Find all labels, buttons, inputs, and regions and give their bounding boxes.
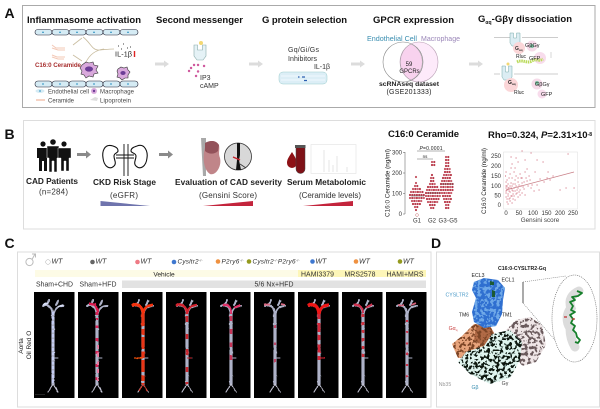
venn labels: Endothelial Cell	[367, 34, 417, 43]
venn labels: Macrophage	[421, 36, 460, 43]
text: evaluation of CAD severity: Evaluation of CAD severity	[175, 177, 282, 187]
text: evaluation of CAD severity: (Gensini Score)	[199, 191, 257, 200]
chart: scatter of ceramide vs Gensini: 150	[491, 174, 502, 180]
chart: scatter of ceramide vs Gensini: 50	[494, 194, 502, 200]
genotype legend: -/-	[296, 258, 300, 262]
aorta image 4	[166, 292, 206, 398]
genotype legend: -/-	[199, 258, 203, 262]
aorta image 8	[342, 292, 382, 398]
structure labels: TM1	[502, 312, 512, 318]
chart: beeswarm of ceramide by group: 100	[392, 192, 403, 198]
chart: scatter of ceramide vs Gensini: 100	[491, 184, 502, 190]
structure labels: Gα	[449, 326, 456, 332]
chart: beeswarm of ceramide by group: G3-G5	[438, 218, 458, 224]
gradient wedge: eGFR	[100, 201, 150, 206]
vehicle band: Vehicle	[153, 272, 175, 278]
IL-1 beta release: IL-1β	[115, 50, 132, 58]
structure labels: Nb35	[439, 382, 451, 388]
chart: scatter of ceramide vs Gensini: Gensini score	[521, 217, 560, 224]
chart: scatter of ceramide vs Gensini: 50	[516, 211, 523, 217]
genotype legend: WT	[52, 258, 63, 266]
chart: scatter of ceramide vs Gensini: 150	[541, 211, 552, 217]
diet labels: 5/6 Nx+HFD	[254, 282, 294, 288]
heading: G alpha q dissociation: αq	[485, 20, 492, 26]
heading: G alpha q dissociation: G	[478, 14, 485, 25]
chart: scatter of ceramide vs Gensini: 250	[491, 154, 502, 160]
culture dish	[279, 72, 327, 84]
dissociation schematic: GβGγ	[535, 82, 550, 88]
structure labels: Gγ	[502, 381, 509, 387]
dissociation schematic: αq	[512, 82, 516, 86]
chart title: C16:0 ceramide: C16:0 Ceramide	[388, 129, 459, 140]
icon: male symbol	[26, 254, 36, 266]
genotype legend: Cysltr2	[252, 258, 274, 266]
IP3 and cAMP	[200, 75, 219, 90]
genotype legend: WT	[96, 258, 107, 266]
genotype legend: -/-	[274, 258, 279, 262]
structure labels: ECL1	[502, 278, 515, 284]
icon: heart	[201, 138, 220, 176]
venn diagram	[383, 42, 438, 82]
text: serum metabolomic: Serum Metabolomic	[287, 177, 366, 187]
genotype legend: WT	[403, 258, 415, 266]
genotype legend	[46, 258, 415, 266]
axis label: aorta oil red O: Aorta	[18, 338, 25, 354]
axis label: aorta oil red O: Oil Red O	[26, 331, 33, 359]
chart: beeswarm of ceramide by group: P=0.0001	[420, 146, 443, 152]
chart: beeswarm of ceramide by group: ns	[423, 154, 428, 159]
diet labels: Sham+CHD	[36, 282, 73, 288]
dissociation schematic: GβGγ	[525, 43, 540, 49]
dataset caption	[379, 81, 440, 96]
chart: scatter of ceramide vs Gensini: 0	[498, 203, 502, 209]
callout: ligand density	[552, 275, 597, 362]
macrophages	[80, 62, 130, 80]
gradient wedge: Gensini	[203, 201, 253, 206]
aorta image 1	[34, 292, 74, 398]
panel label D: D	[431, 235, 441, 251]
chart: scatter of ceramide vs Gensini: 0	[504, 211, 508, 217]
chart: beeswarm of ceramide by group: 0	[399, 212, 403, 218]
blue CYSLTR2 receptor	[472, 278, 505, 328]
heading: GPCR expression: GPCR expression	[373, 15, 454, 26]
vehicle band	[35, 270, 298, 278]
panel label B: B	[4, 126, 15, 142]
arrow	[249, 60, 263, 68]
legend: inflammasome cells	[36, 88, 135, 104]
chart: scatter of ceramide vs Gensini: 200	[491, 164, 502, 170]
genotype legend: WT	[316, 258, 327, 266]
genotype legend: P2ry6	[278, 258, 296, 266]
mint G beta gamma density	[458, 330, 522, 384]
ceramide molecules	[52, 45, 65, 59]
treatment bands: MRS2578	[344, 272, 376, 278]
chart: beeswarm of ceramide by group	[384, 146, 458, 224]
heading: inflammasome activation: Inflammasome activation	[27, 15, 141, 26]
treatment bands: HAMI3379	[301, 272, 334, 278]
inhibitors: Inhibitors	[288, 56, 318, 63]
dissociation schematic: GFP	[529, 56, 541, 62]
panel: C	[4, 235, 431, 407]
dissociation schematic: Rluc	[514, 90, 525, 96]
panel: A	[4, 5, 595, 108]
structure labels: CYSLTR2	[446, 292, 469, 298]
panel label A: A	[4, 5, 15, 21]
chart: scatter of ceramide vs Gensini: C16:0 Ceramide (ng/ml)	[481, 148, 488, 214]
arrow	[469, 60, 483, 68]
chart: scatter of ceramide vs Gensini: 200	[555, 211, 566, 217]
diet labels	[36, 280, 426, 288]
aorta image 2	[78, 292, 118, 398]
venn diagram: GPCRs	[399, 69, 420, 75]
arrow	[77, 150, 91, 158]
aorta image 7	[298, 292, 338, 398]
chart title: Rho: Rho=0.324, P=2.31×10	[488, 130, 588, 141]
structure labels: Gβ	[471, 385, 479, 391]
structure labels: ECL3	[472, 273, 485, 279]
gradient wedge: ceramide	[303, 201, 353, 206]
dissociation schematic	[494, 33, 558, 98]
endothelial cell rows	[35, 30, 138, 87]
axis label: aorta oil red O	[18, 331, 33, 359]
icon: angiography lens	[224, 143, 252, 170]
venn diagram: 59	[406, 62, 413, 68]
venn labels	[367, 34, 460, 43]
icon: kidneys	[103, 144, 147, 176]
inhibitors	[288, 47, 330, 71]
structure labels: TM6	[459, 312, 469, 318]
chart: scatter of ceramide vs Gensini: 100	[528, 211, 539, 217]
text: CAD patients: (n=284)	[39, 188, 68, 196]
dataset caption: scRNAseq dataset	[379, 81, 440, 88]
arrow	[155, 60, 169, 68]
label: C16:0 ceramide: C16:0 Ceramide	[35, 62, 82, 69]
icon: patients	[37, 139, 71, 172]
legend: inflammasome cells: Endothelial cell	[48, 90, 89, 96]
IP3 and cAMP: IP3	[200, 75, 211, 82]
chart title: Rho: -8	[588, 132, 592, 138]
title: structure: C16:0-CYSLTR2-Gq	[498, 266, 546, 272]
inhibitors: IL-1β	[314, 64, 330, 71]
genotype legend: WT	[140, 258, 152, 266]
treatment bands: HAMI+MRS	[386, 272, 424, 278]
text: CAD patients	[26, 176, 78, 196]
inhibitors: Gq/Gi/Gs	[288, 47, 320, 54]
genotype legend: WT	[359, 258, 371, 266]
text: evaluation of CAD severity	[175, 177, 282, 200]
panel label C: C	[4, 235, 15, 251]
text: CAD patients: CAD Patients	[26, 176, 78, 186]
treatment bands	[298, 270, 426, 278]
dissociation schematic: GFP	[541, 92, 553, 98]
IL-1 beta release	[115, 44, 134, 58]
chart: scatter of ceramide vs Gensini: 250	[568, 211, 579, 217]
chart: beeswarm of ceramide by group: 200	[392, 171, 403, 177]
text: CKD risk stage: CKD Risk Stage	[93, 177, 156, 187]
icon: receptor	[194, 41, 206, 60]
chart: beeswarm of ceramide by group: G1	[413, 218, 422, 224]
dataset caption: (GSE201333)	[386, 89, 432, 96]
IP3 and cAMP: cAMP	[200, 83, 219, 90]
heading: second messenger: Second messenger	[156, 15, 243, 26]
bracket	[522, 282, 524, 303]
zoom callout lines	[523, 276, 566, 346]
orange G alpha q density	[452, 324, 498, 358]
genotype legend: Cysltr2	[178, 258, 199, 266]
text: CKD risk stage: (eGFR)	[110, 191, 138, 200]
grey Nb35 density	[506, 317, 546, 366]
aorta image 3	[122, 292, 162, 398]
dissociation schematic: G	[508, 80, 512, 86]
legend: inflammasome cells: Ceramide	[48, 98, 75, 104]
structure labels: q	[456, 328, 458, 332]
dissociation schematic: αq	[519, 48, 523, 52]
icon: blood drop and tube	[287, 145, 306, 174]
legend: inflammasome cells: Lipoprotein	[100, 98, 131, 104]
aorta image 9	[386, 292, 426, 398]
text: CKD risk stage	[93, 177, 156, 200]
chart: beeswarm of ceramide by group: 300	[392, 150, 403, 156]
text: serum metabolomic	[287, 177, 366, 200]
aorta image 6	[254, 292, 294, 398]
genotype legend: -/-	[240, 258, 244, 262]
dissociation schematic: G	[515, 46, 519, 52]
arrow	[351, 60, 365, 68]
genotype legend: P2ry6	[222, 258, 239, 266]
legend: inflammasome cells: Macrophage	[100, 90, 135, 96]
signalling arrows	[73, 37, 114, 62]
panel: B	[4, 120, 595, 229]
structure labels	[439, 273, 515, 391]
heading: G protein selection: G protein selection	[262, 15, 347, 26]
chart: metabolomics spectrum	[311, 144, 356, 174]
arrow	[159, 150, 173, 158]
chart: beeswarm of ceramide by group: G2	[428, 218, 437, 224]
second messenger dots	[189, 65, 204, 76]
panel: D	[431, 235, 600, 407]
diet labels: Sham+HFD	[80, 282, 117, 288]
heading: G alpha q dissociation: -Gβγ dissociation	[492, 14, 572, 25]
chart: scatter of ceramide vs Gensini	[481, 148, 579, 224]
text: serum metabolomic: (Ceramide levels)	[299, 191, 361, 200]
aorta image 5	[210, 292, 250, 398]
dissociation schematic: Rluc	[516, 54, 527, 60]
chart: beeswarm of ceramide by group: C16:0 Ceramide (ng/ml)	[384, 149, 392, 217]
